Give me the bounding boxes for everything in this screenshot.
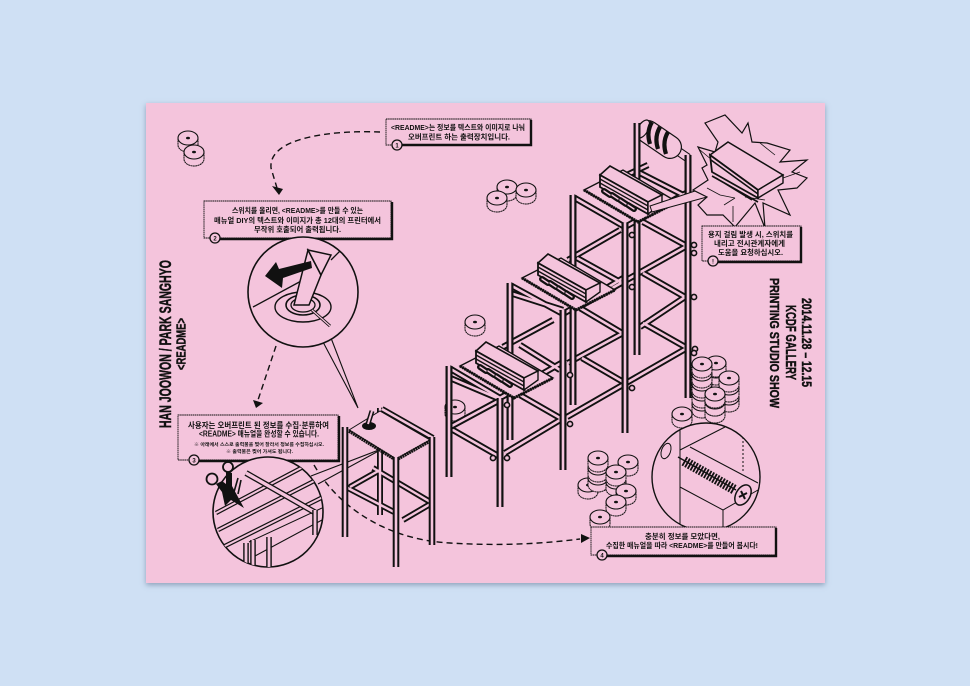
poster sheet	[146, 103, 825, 583]
callout: step 3: ※ 출력물은 찢어 가셔도 됩니다.	[226, 448, 293, 455]
coins: centre group	[487, 180, 536, 212]
callout: step 3: ※ 아래에서 스스로 출력물을 찢어 잘라서 정보를 수집하십시오.	[194, 441, 324, 448]
icon: scissors	[206, 462, 244, 508]
heading: show info, vertical right: KCDF GALLERY	[782, 305, 798, 380]
coin: under lower tier	[445, 400, 465, 421]
callout: step 4: 수집한 매뉴얼을 따라 <README>를 만들어 봅시다!	[606, 541, 758, 550]
paper roll	[634, 118, 688, 158]
small switch	[362, 411, 376, 430]
dashed arrow: step 3 to step 4	[314, 465, 590, 544]
coin stacks: lower group	[578, 451, 638, 531]
callout: step 3: 3	[192, 458, 196, 464]
heading: authors, vertical left: <README>	[174, 318, 188, 370]
callout: step 1	[386, 119, 531, 150]
callout: step 2: 무작위 호출되어 출력됩니다.	[254, 225, 341, 234]
callout: warning: !	[712, 260, 714, 266]
dashed arrow: step 2 to step 3	[253, 346, 276, 408]
detail circle: cutting with scissors	[206, 457, 323, 570]
pointer wedge: scissors circle to mini stand	[311, 448, 384, 484]
printer: lower tier	[460, 342, 553, 398]
burst detail with jammed printer	[693, 115, 807, 228]
coins: top left pair	[178, 131, 204, 166]
mini stand with switch	[345, 408, 433, 567]
callout: warning: 내리고 전시관계자에게	[714, 239, 785, 248]
callout: step 2: 2	[213, 236, 217, 242]
detail circle: toggle switch	[248, 237, 358, 347]
callout: warning: 도움을 요청하십시오.	[718, 248, 783, 257]
heading: show info, vertical right: 2014.11.28 – 12.15	[799, 298, 815, 387]
callout: step 1: 오버프린트 하는 출력장치입니다.	[408, 132, 510, 142]
heading: authors, vertical left	[157, 260, 188, 428]
callout: step 2	[204, 201, 392, 243]
callout: step 4: 4	[600, 554, 604, 560]
heading: show info, vertical right	[767, 278, 815, 409]
callout: step 1: 1	[395, 144, 399, 150]
heading: show info, vertical right: PRINTING STUDIO SHOW	[767, 278, 782, 409]
coin stacks: right of rack	[672, 356, 739, 428]
callout: step 3: 사용자는 오버프린트 된 정보를 수집·분류하여	[188, 420, 329, 430]
heading: authors, vertical left: HAN JOOWON / PARK SANGHYO	[157, 260, 175, 428]
callout: step 4: 충분히 정보를 모았다면,	[645, 532, 720, 541]
printer: top tier	[584, 166, 677, 222]
bolts	[490, 232, 698, 461]
pointer wedge: switch to mini stand	[323, 338, 358, 408]
callout: step 2: 매뉴얼 DIY의 텍스트와 이미지가 총 12대의 프린터에서	[214, 216, 381, 225]
callout: step 1: <README>는 정보를 텍스트와 이미지로 나눠	[391, 123, 525, 132]
detail circle: screw	[652, 423, 760, 531]
callout: warning: 용지 걸림 발생 시, 스위치를	[708, 230, 793, 239]
callout: step 2: 스위치를 올리면, <README>를 만들 수 있는	[232, 206, 363, 215]
coin: single above frame	[465, 315, 485, 336]
callout: warning	[702, 226, 801, 266]
pointer wedge: printer to burst	[650, 187, 707, 212]
callout: step 3: <README> 매뉴얼을 완성할 수 있습니다.	[199, 428, 319, 438]
dashed arrow: step 1 to step 2	[271, 132, 380, 195]
callout: step 4	[591, 527, 776, 560]
isometric printer rack	[449, 118, 698, 507]
printer: middle tier	[522, 254, 615, 310]
callout: step 3	[178, 415, 339, 465]
